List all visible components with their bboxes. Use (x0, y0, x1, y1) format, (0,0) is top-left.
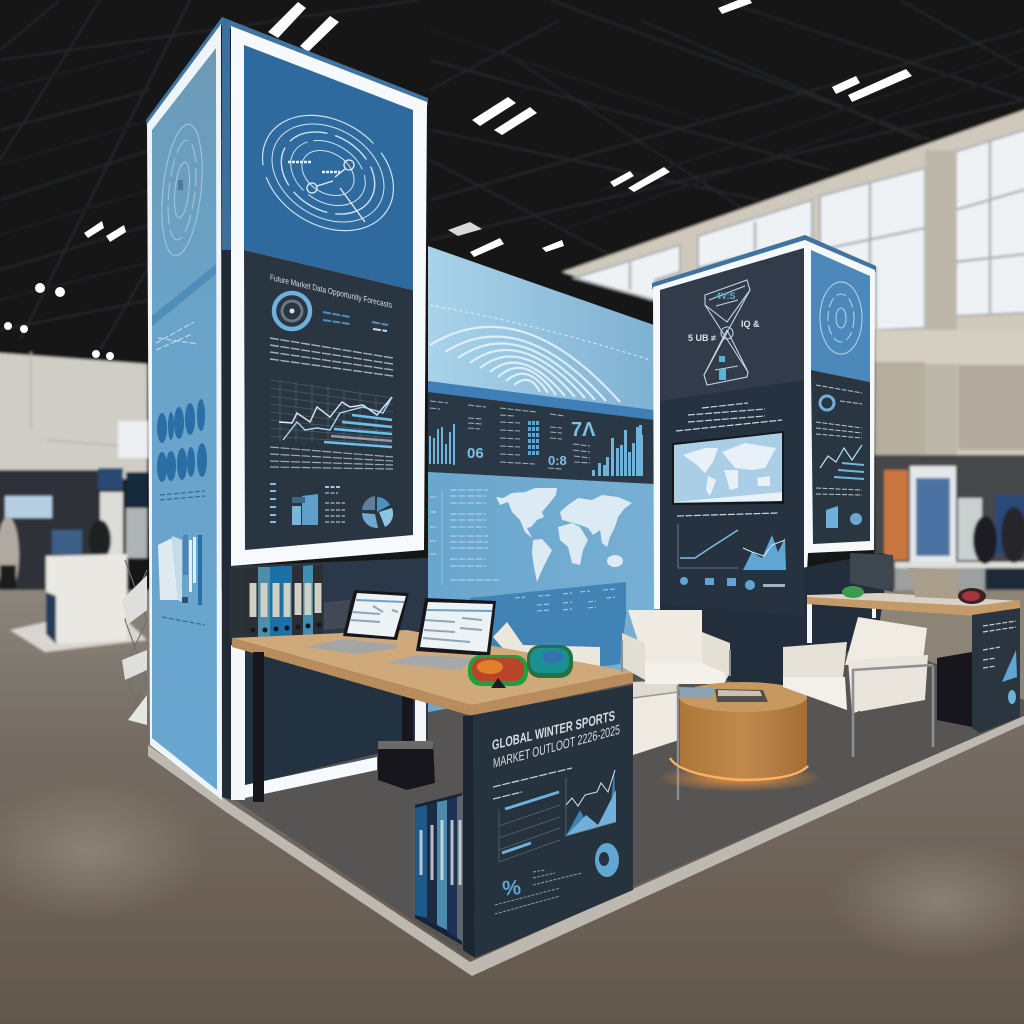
desk front panel (463, 685, 633, 958)
side circles row (157, 399, 207, 482)
upper seam (222, 18, 231, 250)
bottom bar chart (270, 484, 318, 525)
magazines (679, 687, 768, 702)
hourglass labels: 4V:S (716, 291, 736, 301)
data band charts (429, 424, 643, 476)
back chair left (493, 622, 600, 670)
round table (656, 682, 824, 792)
front dark panel (244, 250, 413, 550)
left hall wall (0, 350, 147, 480)
under desk light strip (245, 757, 377, 798)
right panel chart (1002, 650, 1017, 682)
dark data band (428, 392, 654, 484)
table top (679, 682, 807, 712)
window mullions (630, 140, 1024, 330)
background booth left (0, 421, 148, 593)
back wall panel (428, 246, 654, 712)
binders on desk (230, 565, 323, 640)
side band (152, 264, 216, 326)
dark speaker box (937, 652, 972, 727)
floor sheen (0, 780, 210, 920)
lounge chair centre (622, 610, 730, 684)
desk panel small text (495, 870, 582, 914)
papers stack (324, 600, 350, 630)
data band numerals: 06 (467, 445, 484, 462)
floor sheen right (830, 840, 1024, 960)
right panel donut (1008, 690, 1016, 704)
side emblem (156, 122, 208, 258)
under-tower wall (231, 558, 428, 790)
right desk panel (972, 608, 1020, 733)
front white frame (231, 26, 427, 566)
bag under desk (378, 741, 435, 790)
right panel text (983, 621, 1016, 668)
desk panel title: MARKET OUTLOOT 2226-2025 (493, 722, 620, 771)
bottom legend (325, 487, 345, 522)
right tower (652, 235, 890, 690)
right side dark face (811, 370, 870, 544)
ceiling lights (4, 0, 912, 360)
right desk (807, 553, 1020, 733)
desk panel title: GLOBAL WINTER SPORTS (492, 708, 615, 754)
white counter (10, 622, 147, 652)
platform base edge (148, 714, 1024, 976)
tower icon row (680, 577, 785, 590)
orbit nodes (288, 160, 365, 222)
lower strip text (515, 589, 615, 611)
table body (680, 697, 807, 778)
hourglass labels: IQ & (741, 319, 760, 329)
donut chart (274, 293, 310, 329)
right tower dark front (660, 248, 804, 615)
arcs on back wall (430, 305, 650, 402)
side row captions (160, 491, 205, 625)
tower outer edge (652, 235, 876, 289)
desk surface (807, 593, 1020, 612)
desk panel subtitle (493, 768, 572, 799)
tower lower charts (678, 524, 786, 570)
ceiling trusses (0, 0, 1024, 350)
left side blue face (152, 48, 217, 790)
desk panel donut (595, 843, 619, 877)
lit right strip (415, 700, 426, 742)
floor (0, 590, 1024, 1024)
monitor (672, 431, 784, 505)
desk edge (807, 597, 1020, 616)
map background (428, 472, 654, 712)
side chair (633, 680, 679, 800)
world map (496, 488, 632, 582)
left tower white frame (147, 24, 222, 800)
data band table cells (528, 421, 539, 455)
led strip (670, 758, 808, 780)
right side details (816, 385, 864, 528)
right side blue face (811, 250, 870, 382)
red goggles (468, 655, 528, 688)
monitor map (674, 443, 782, 502)
tower lower wall (660, 553, 890, 690)
binders in front of panel (415, 793, 463, 945)
right side circle (820, 282, 862, 354)
wall seams (31, 352, 147, 448)
hourglass icons (719, 356, 726, 380)
side heading (156, 322, 198, 350)
panel heading: Future Market Data Opportunity Forecasts (270, 272, 392, 310)
donut legend (323, 312, 388, 331)
laptop on right desk (908, 568, 958, 599)
carpet (232, 600, 1024, 958)
goggles on right desk (842, 586, 986, 604)
windows (575, 124, 1024, 330)
lower wall right (875, 330, 1024, 364)
data band numerals: 7Λ (571, 419, 596, 441)
hourglass labels (688, 291, 760, 343)
right tower white frame (653, 240, 875, 610)
front upper blue panel (244, 45, 413, 290)
right hall upper wall (562, 96, 1024, 470)
desk leg (253, 652, 264, 802)
data band numerals: 0:8 (548, 453, 567, 468)
display rack (122, 560, 147, 725)
desk panel area chart (566, 770, 616, 836)
background booths right (884, 466, 1024, 618)
desk front edge (232, 638, 633, 716)
table glow (656, 764, 824, 792)
lower dark front (660, 380, 804, 615)
file stack (850, 553, 893, 592)
data band numerals (467, 419, 596, 468)
map area text (430, 490, 500, 585)
lounge chair right (783, 617, 933, 757)
data band small text (430, 401, 590, 469)
paragraph one (270, 338, 393, 376)
tower outer edge (146, 17, 428, 128)
hourglass infographic (704, 280, 750, 385)
lower seam (222, 250, 232, 800)
pie chart (362, 496, 393, 528)
lit left strip (231, 645, 245, 800)
blue divider band (428, 381, 654, 422)
light strips (807, 602, 812, 643)
side pictogram (158, 535, 202, 605)
blue goggles (527, 645, 573, 678)
line chart (270, 380, 393, 447)
seam (804, 248, 810, 553)
percent icon: % (501, 876, 522, 901)
lower blue strip (470, 582, 626, 680)
hourglass labels: 5 UB ≠ (688, 333, 716, 343)
tower dark text (676, 403, 782, 516)
paragraph two (270, 447, 393, 469)
laptop two (385, 598, 496, 670)
pillar (925, 150, 957, 470)
desk panel title (492, 708, 620, 771)
second desk leg (402, 695, 413, 741)
left tower (146, 17, 428, 800)
desk top (232, 630, 633, 705)
concentric circle graphic (241, 92, 415, 254)
desk panel bar chart (499, 792, 560, 862)
under desk dark wall (245, 650, 414, 785)
laptop one (303, 590, 409, 654)
